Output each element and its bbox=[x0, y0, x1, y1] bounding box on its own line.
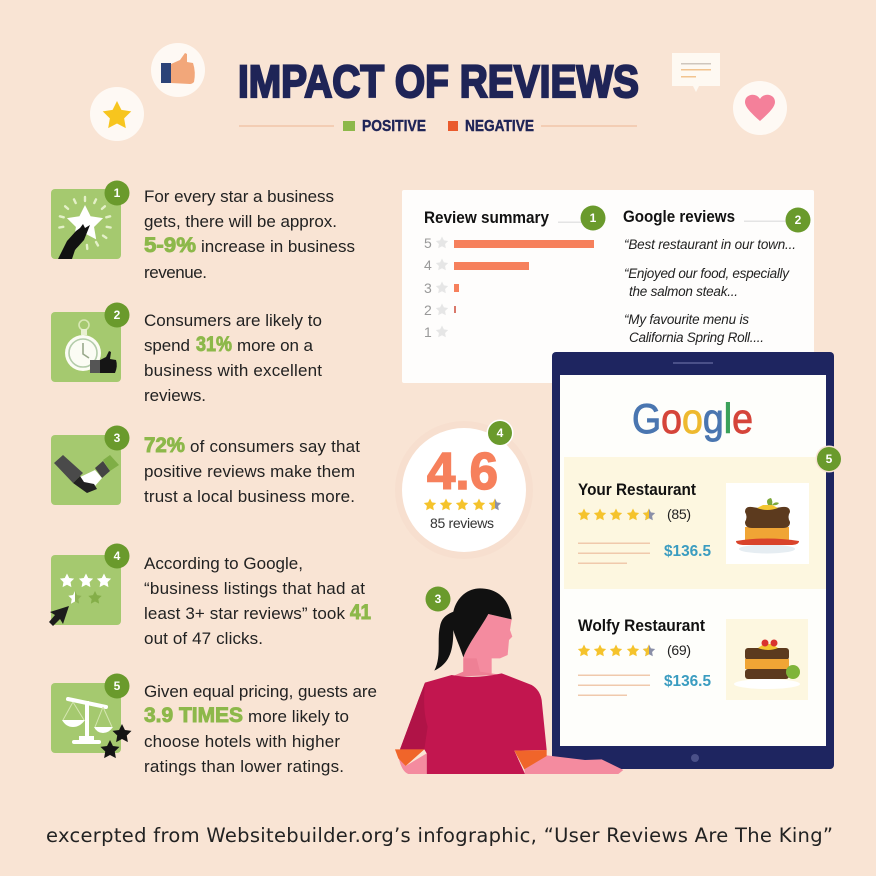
panel: stat 1 bbox=[51, 180, 355, 282]
icon: handshake bbox=[51, 435, 121, 505]
text block: 41 bbox=[350, 601, 371, 624]
listing: your restaurant: Your Restaurant bbox=[578, 481, 696, 499]
text block: of consumers say that bbox=[190, 437, 360, 456]
text block bbox=[144, 311, 322, 405]
icon: hand reaching star bbox=[51, 189, 121, 259]
bar chart: ratings: 1 bbox=[424, 324, 432, 340]
rating callout: 4.6 bbox=[427, 443, 498, 501]
icon: scales and stars bbox=[51, 683, 121, 753]
tablet bbox=[552, 352, 834, 769]
food image 2 bbox=[726, 619, 808, 700]
panel: stat 3 bbox=[51, 426, 360, 506]
panel: review card bbox=[402, 190, 814, 383]
text block: spend bbox=[144, 336, 190, 355]
footer credit: excerpted from Websitebuilder.org’s infographic, “User Reviews Are The King” bbox=[46, 824, 833, 847]
bar chart: ratings: 2 bbox=[424, 302, 432, 318]
text block: According to Google, bbox=[144, 554, 303, 573]
text block: more on a bbox=[237, 336, 314, 355]
listing: your restaurant: $136.5 bbox=[664, 543, 711, 560]
rating callout: 85 reviews bbox=[430, 515, 494, 531]
text block: ratings than lower ratings. bbox=[144, 757, 344, 776]
icon: speech bubble bbox=[672, 53, 720, 92]
text block: revenue. bbox=[144, 263, 207, 282]
google reviews heading bbox=[623, 208, 810, 232]
number badge bbox=[104, 302, 130, 328]
number badge bbox=[104, 180, 130, 206]
number badge bbox=[104, 674, 130, 698]
number badge: 2 bbox=[114, 308, 121, 322]
text block: 72% bbox=[144, 434, 185, 457]
rating callout: 4 bbox=[497, 426, 504, 440]
text block: Consumers are likely to bbox=[144, 311, 322, 330]
number badge: tablet: 5 bbox=[826, 452, 833, 466]
text block: 5-9% bbox=[144, 234, 196, 257]
text block: 31% bbox=[196, 333, 232, 356]
listing: wolfy restaurant bbox=[578, 617, 808, 700]
text block bbox=[144, 554, 371, 648]
review summary heading bbox=[424, 206, 606, 230]
title: IMPACT OF REVIEWS bbox=[238, 56, 639, 107]
number badge: person: 3 bbox=[435, 592, 442, 606]
rating stars bbox=[578, 644, 655, 656]
review quotes: the salmon steak... bbox=[629, 284, 738, 299]
text block: least 3+ star reviews” took bbox=[144, 604, 346, 623]
number badge: person bbox=[426, 586, 450, 612]
panel: stat 4 bbox=[49, 544, 371, 648]
listing: wolfy restaurant: Wolfy Restaurant bbox=[578, 617, 705, 635]
food image 1 bbox=[726, 483, 809, 564]
google reviews heading: 2 bbox=[795, 213, 802, 227]
google logo: Google bbox=[632, 395, 753, 442]
review quotes: “Enjoyed our food, especially bbox=[624, 266, 790, 281]
text block: “business listings that had at bbox=[144, 579, 365, 598]
number badge: 1 bbox=[114, 186, 121, 200]
number badge bbox=[104, 426, 130, 450]
text block bbox=[144, 682, 377, 776]
listing: wolfy restaurant: $136.5 bbox=[664, 673, 711, 690]
text block: For every star a business bbox=[144, 187, 334, 206]
legend bbox=[239, 118, 637, 135]
rating callout bbox=[395, 420, 533, 559]
number badge bbox=[104, 544, 130, 568]
review summary heading: 1 bbox=[590, 211, 597, 225]
review quotes: “My favourite menu is bbox=[624, 312, 749, 327]
text block: 3.9 TIMES bbox=[144, 704, 243, 727]
review quotes bbox=[624, 237, 796, 345]
text block bbox=[144, 434, 360, 506]
rating stars bbox=[424, 498, 501, 510]
panel: stat 2 bbox=[51, 302, 322, 405]
person bbox=[395, 588, 623, 774]
bar chart: ratings bbox=[424, 235, 594, 340]
legend: POSITIVE bbox=[362, 118, 426, 135]
review summary heading: Review summary bbox=[424, 209, 550, 227]
icon: thumbs up badge bbox=[151, 43, 205, 97]
icon: stars and cursor bbox=[49, 555, 121, 626]
icon: stopwatch and thumb bbox=[51, 312, 121, 382]
text block: business with excellent bbox=[144, 361, 322, 380]
number badge: 4 bbox=[114, 549, 121, 563]
legend: NEGATIVE bbox=[465, 118, 534, 135]
text block: reviews. bbox=[144, 386, 206, 405]
text block: choose hotels with higher bbox=[144, 732, 340, 751]
review quotes: California Spring Roll.... bbox=[629, 330, 764, 345]
number badge: 5 bbox=[114, 679, 121, 693]
rating stars bbox=[578, 508, 655, 520]
text block: Given equal pricing, guests are bbox=[144, 682, 377, 701]
text block: out of 47 clicks. bbox=[144, 629, 263, 648]
panel: stat 5 bbox=[51, 674, 377, 776]
text block: increase in business bbox=[201, 237, 355, 256]
listing: your restaurant bbox=[564, 457, 826, 589]
icon: heart badge bbox=[733, 81, 787, 135]
bar chart: ratings: 5 bbox=[424, 235, 432, 251]
listing: your restaurant: (85) bbox=[667, 506, 691, 522]
text block: more likely to bbox=[248, 707, 349, 726]
google reviews heading: Google reviews bbox=[623, 208, 735, 226]
number badge: tablet bbox=[816, 446, 842, 472]
icon: black stars bbox=[100, 724, 132, 758]
text block: trust a local business more. bbox=[144, 487, 355, 506]
number badge: 3 bbox=[114, 431, 121, 445]
review quotes: “Best restaurant in our town... bbox=[624, 237, 796, 252]
bar chart: ratings: 3 bbox=[424, 280, 432, 296]
icon: star badge bbox=[90, 87, 144, 141]
bar chart: ratings: 4 bbox=[424, 257, 432, 273]
text block: gets, there will be approx. bbox=[144, 212, 337, 231]
text block bbox=[144, 187, 355, 282]
listing: wolfy restaurant: (69) bbox=[667, 642, 691, 658]
text block: positive reviews make them bbox=[144, 462, 355, 481]
